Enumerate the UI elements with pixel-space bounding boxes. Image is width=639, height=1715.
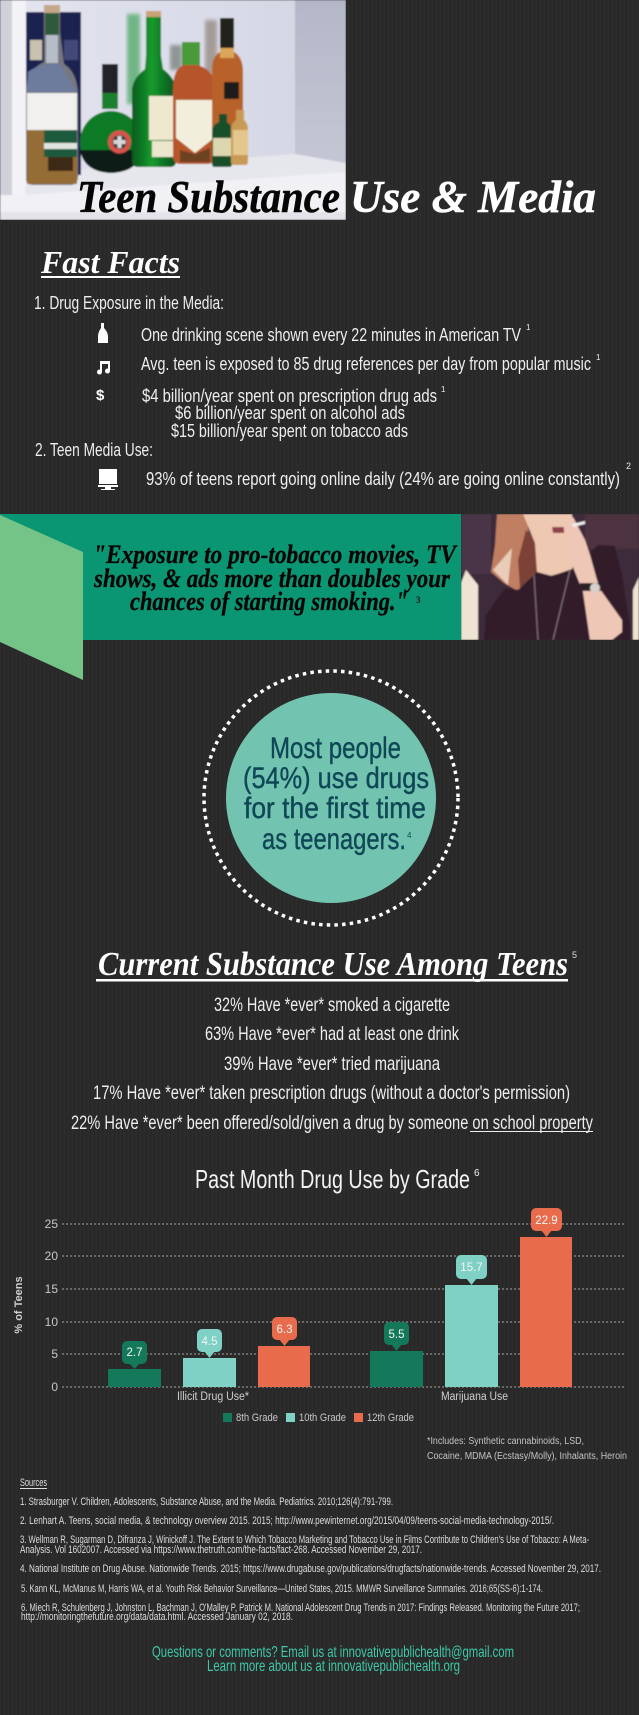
value callouts	[122, 1208, 562, 1369]
icon: computer monitor	[98, 469, 118, 490]
bars	[108, 1237, 572, 1387]
text block: lifetime substance use statistics: 63% Have *ever* had at least one drink	[205, 1023, 459, 1045]
contact footer	[152, 1644, 514, 1675]
y axis labels: 10	[45, 1315, 58, 1329]
y axis labels: 20	[45, 1249, 58, 1263]
heading: past month drug use by grade: 6	[474, 1168, 480, 1179]
text block: drug exposure in the media: 1	[526, 323, 531, 332]
icon: dollar sign: $	[96, 387, 105, 404]
bar chart: past month drug use by grade	[13, 1208, 626, 1424]
text block: drug exposure in the media: $15 billion/year spent on tobacco ads	[171, 420, 408, 441]
footnote: illicit drug definition: *Includes: Synthetic cannabinoids, LSD,	[427, 1436, 584, 1447]
callout: most people use drugs first as teenagers	[204, 671, 458, 925]
quote text: 3	[416, 595, 421, 605]
circle text: Most people	[270, 732, 401, 765]
quote text: shows, & ads more than doubles your	[93, 564, 451, 593]
banner: quote on tobacco exposure	[0, 514, 461, 680]
value callouts: 6.3	[276, 1324, 292, 1336]
value callouts: 15.7	[460, 1262, 483, 1274]
circle text: 4	[407, 831, 412, 840]
category labels: Illicit Drug Use*	[177, 1391, 249, 1403]
circle text	[243, 732, 429, 856]
circle text: as teenagers.	[262, 823, 406, 856]
text block: drug exposure in the media: 1. Drug Exposure in the Media:	[34, 292, 224, 313]
heading: current substance use among teens: 5	[572, 950, 577, 960]
heading: past month drug use by grade: Past Month Drug Use by Grade	[195, 1164, 470, 1194]
value callouts: 4.5	[202, 1336, 218, 1348]
ribbon fold	[0, 515, 83, 680]
text block: drug exposure in the media: One drinking scene shown every 22 minutes in American TV	[141, 324, 521, 345]
quote text: "Exposure to pro-tobacco movies, TV	[93, 540, 458, 569]
y axis labels: 25	[45, 1217, 58, 1231]
y axis title: % of Teens	[13, 1276, 25, 1334]
text block: lifetime substance use statistics	[71, 994, 593, 1134]
text block: lifetime substance use statistics: 32% Have *ever* smoked a cigarette	[214, 994, 450, 1016]
circle text: (54%) use drugs	[243, 762, 429, 795]
heading: Fast Facts: Fast Facts	[40, 244, 180, 280]
dotted ring	[204, 671, 458, 925]
category labels: Marijuana Use	[441, 1391, 508, 1403]
footnote: illicit drug definition	[427, 1436, 627, 1462]
photo: liquor bottles on a shelf	[0, 0, 346, 220]
text block: drug exposure in the media: $4 billion/year spent on prescription drug ads	[142, 385, 437, 406]
text block: drug exposure in the media	[34, 292, 601, 441]
y axis labels: 15	[45, 1282, 58, 1296]
sources list: Sources	[20, 1477, 47, 1489]
title: Use & Media	[350, 171, 596, 222]
legend: 12th Grade	[367, 1412, 414, 1424]
text block: drug exposure in the media: $6 billion/year spent on alcohol ads	[175, 402, 405, 423]
category labels	[177, 1391, 508, 1403]
text block: teen media use	[35, 439, 631, 489]
text block: teen media use: 2. Teen Media Use:	[35, 439, 153, 460]
sources list: 1. Strasburger V. Children, Adolescents, Substance Abuse, and the Media. Pediatrics. 2010;126(4):791-799.	[20, 1496, 393, 1508]
legend: 8th Grade	[236, 1412, 278, 1424]
value callouts: 2.7	[126, 1347, 142, 1359]
photo: teen girl smoking	[461, 514, 639, 640]
y axis labels: 5	[51, 1347, 58, 1361]
quote text: chances of starting smoking."	[130, 587, 408, 616]
icon: music note	[97, 361, 110, 375]
value callouts: 5.5	[388, 1329, 404, 1341]
sources list: http://monitoringthefuture.org/data/data.html. Accessed January 02, 2018.	[21, 1611, 293, 1623]
title: Teen Substance	[77, 171, 340, 222]
heading: current substance use among teens: Current Substance Use Among Teens	[98, 946, 568, 983]
text block: drug exposure in the media: 1	[596, 353, 601, 362]
icon: bottle	[98, 323, 108, 343]
legend: 10th Grade	[299, 1412, 346, 1424]
value callouts: 22.9	[535, 1215, 558, 1227]
contact footer: Learn more about us at innovativepublichealth.org	[207, 1658, 460, 1675]
sources list: Analysis. Vol 1602007. Accessed via https://www.thetruth.com/the-facts/fact-268. Accessed November 29, 2017.	[20, 1544, 422, 1556]
circle text: for the first time	[244, 792, 426, 825]
title	[77, 171, 596, 222]
teal circle	[226, 693, 436, 903]
y axis labels	[45, 1217, 58, 1394]
sources list	[20, 1477, 601, 1623]
quote text	[93, 540, 458, 616]
legend	[223, 1412, 414, 1424]
text block: lifetime substance use statistics: 39% Have *ever* tried marijuana	[224, 1053, 440, 1075]
text block: teen media use: 2	[626, 461, 631, 471]
y axis labels: 0	[51, 1380, 58, 1394]
text block: drug exposure in the media: 1	[441, 385, 446, 394]
